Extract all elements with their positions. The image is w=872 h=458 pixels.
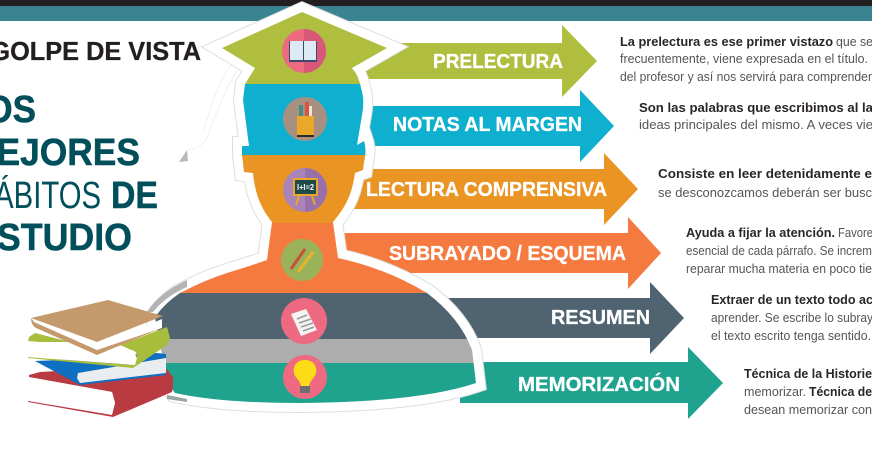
icon: document (281, 298, 327, 344)
arrow: memorización: MEMORIZACIÓN (518, 372, 680, 396)
arrow: notas al margen: NOTAS AL MARGEN (393, 114, 582, 136)
arrow: prelectura (355, 25, 597, 97)
arrow: lectura comprensiva: LECTURA COMPRENSIVA (366, 179, 607, 201)
text block: notas al margen: ideas principales del mismo. A veces vie (639, 118, 872, 132)
top bar (0, 0, 872, 21)
arrow: resumen (430, 282, 684, 354)
text block: resumen: Extraer de un texto todo ac (711, 293, 872, 307)
text block: notas al margen (639, 101, 872, 132)
arrow: resumen: RESUMEN (551, 307, 650, 329)
text block: memorización (744, 367, 872, 417)
arrow: prelectura: PRELECTURA (433, 51, 563, 73)
title: los mejores hábitos de estudio (0, 89, 158, 259)
text block: resumen: el texto escrito tenga sentido. (711, 329, 871, 343)
arrow: subrayado / esquema (335, 217, 661, 289)
icon: pencil cup (283, 97, 327, 141)
text block: prelectura: del profesor y así nos servirá para comprender (620, 70, 872, 84)
icon: light bulb (283, 355, 327, 399)
icon: chalkboard (283, 168, 327, 212)
icon: pencils (281, 239, 323, 281)
text block: subrayado: Ayuda a fijar la atención. (686, 226, 835, 240)
text block: prelectura (620, 35, 872, 84)
icon: stack of books (28, 300, 173, 417)
text block: prelectura: frecuentemente, viene expresada en el título. (620, 52, 868, 66)
tassel outline (179, 63, 240, 162)
icon: open book (282, 29, 326, 73)
arrow: subrayado / esquema: SUBRAYADO / ESQUEMA (389, 243, 626, 265)
text block: lectura comprensiva (658, 167, 872, 200)
arrow: notas al margen (360, 90, 614, 162)
text block: lectura comprensiva: se desconozcamos deberán ser busc (658, 186, 872, 200)
text block: memorización: desean memorizar con (744, 403, 872, 417)
text block: subrayado: reparar mucha materia en poco tie (686, 262, 872, 276)
text block: lectura comprensiva: Consiste en leer detenidamente e (658, 167, 872, 181)
text block: memorización: memorizar. (744, 385, 806, 399)
text block: resumen (711, 293, 872, 343)
arrow: lectura comprensiva (350, 153, 638, 225)
head silhouette outline (147, 12, 476, 403)
head colour bands (155, 12, 476, 403)
text block: prelectura: La prelectura es ese primer vistazo (620, 35, 833, 49)
text block: memorización: Técnica de (809, 385, 872, 399)
text block: subrayado (686, 226, 872, 276)
text block: memorización: Técnica de la Historie (744, 367, 872, 381)
text block: notas al margen: Son las palabras que escribimos al la (639, 101, 872, 115)
arrow: memorización (460, 347, 723, 419)
icon: chalkboard: l+l=2 (297, 183, 315, 192)
title: los mejores hábitos de estudio: DE (111, 175, 158, 217)
